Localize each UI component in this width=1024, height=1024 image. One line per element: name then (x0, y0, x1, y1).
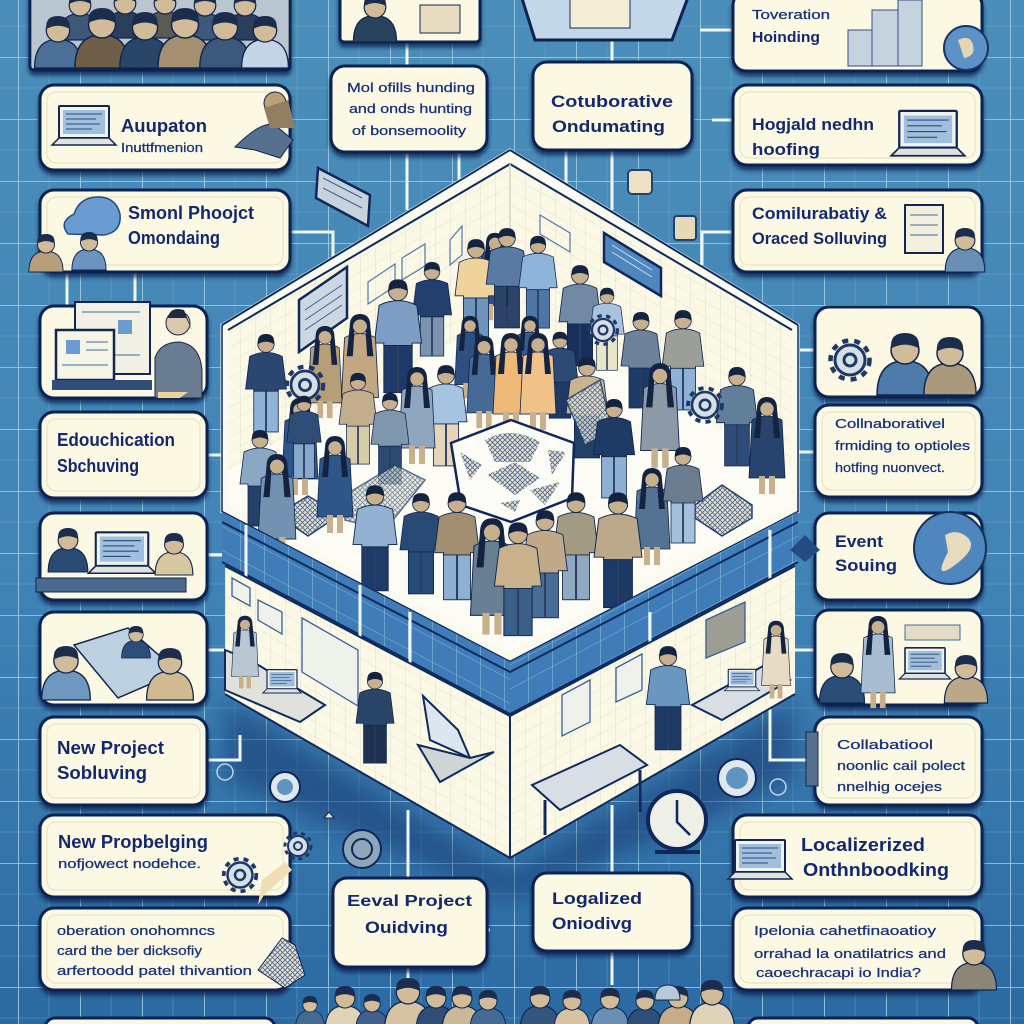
card: New Project (40, 717, 207, 805)
bottom cut-off cards (45, 1018, 978, 1024)
card: Ipelonia (733, 908, 996, 990)
card: Toveration Hooding: Toveration (752, 7, 830, 22)
round dials (217, 759, 786, 868)
lower wall charts (232, 578, 745, 736)
card: Collabatiool: nnelhig ocejes (837, 779, 943, 794)
card: Auupaton: Auupaton (121, 116, 207, 136)
card: Smart Phoject: Smonl Phoojct (128, 203, 254, 223)
card: Collaborative text: hotfing nuonvect. (835, 460, 945, 475)
card: Comilurabatiy: Comilurabatiy & (752, 204, 887, 223)
floor (228, 310, 792, 652)
icon: cloud (64, 197, 120, 235)
lower left person with laptop (225, 616, 325, 722)
card: Ipelonia: caoechracapi io India? (756, 965, 921, 980)
icon: laptop (52, 106, 116, 145)
card: centre top heading left: Mol ofills hunding (347, 80, 475, 95)
card: Logalized: Logalized (552, 889, 642, 908)
icon: seated person (235, 92, 295, 158)
room outer frame (222, 150, 798, 662)
card: Auupaton (40, 85, 295, 170)
panel: top centre-left image (340, 0, 480, 42)
icon: globe (914, 512, 986, 584)
card: Collaborative text (815, 405, 982, 497)
card: Collaborative Ondumating: Cotuborative (551, 92, 673, 111)
lower level room (225, 566, 795, 858)
card: Oberation (40, 908, 305, 990)
card: Logalized: Oniodivg (552, 914, 632, 933)
card: Collabatiool (806, 717, 982, 805)
icon: seated woman (952, 940, 996, 990)
panel: top centre-right image (520, 0, 690, 40)
card: Hogjald (733, 85, 982, 165)
card: New Propbelging: nofjowect nodehce. (58, 856, 201, 871)
card: team at laptop image (815, 610, 988, 708)
card: Collabatiool: Collabatiool (837, 737, 933, 752)
card: Ipelonia: orrahad la onatilatrics and (754, 946, 946, 961)
card: Collaborative text: Collnaborativel (835, 416, 945, 431)
icon: man (155, 309, 202, 398)
wall sketches (368, 215, 570, 304)
card: Comilurabatiy: Oraced Solluving (752, 229, 887, 248)
crouching man with laptop (356, 672, 494, 782)
card: computer screens image (40, 302, 207, 398)
floating sign outside left (316, 168, 370, 226)
card: Toveration Hooding (733, 0, 988, 71)
card: centre top heading left (331, 66, 487, 152)
icon: laptop (891, 111, 965, 156)
card: Localizerized: Localizerized (801, 835, 925, 855)
icon: city buildings (848, 0, 922, 66)
card: Hogjald: Hogjald nedhn (752, 115, 874, 134)
mesh models on floor (285, 380, 752, 536)
card: Comilurabatiy (733, 190, 985, 272)
card: Education: Sbchuving (57, 456, 139, 476)
wall screen right (604, 233, 661, 296)
group of people: middle row (240, 396, 703, 565)
right wall (510, 164, 792, 470)
icon: two people (29, 232, 106, 272)
card: Education (40, 412, 207, 498)
gear emblems (287, 316, 722, 422)
icon: globe (944, 26, 988, 70)
group of people: front row (353, 485, 642, 636)
lower left wall (225, 566, 510, 858)
card: Collaborative text: frmiding to optioles (835, 438, 971, 453)
card: Localizerized (728, 815, 982, 897)
card: Collaborative Ondumating (533, 62, 692, 150)
card: desk team image (36, 513, 207, 600)
card: Smart Phoject: Omondaing (128, 228, 220, 248)
icon: pin (790, 535, 820, 562)
card: Auupaton: Inuttfmenion (121, 140, 203, 155)
left wall (228, 164, 510, 470)
card: Eeval Project (333, 878, 487, 967)
icon: mesh figure (258, 938, 305, 988)
card: Smart Phoject (29, 190, 290, 272)
connector lines (67, 30, 815, 985)
card: Ipelonia: Ipelonia cahetfinaoatioy (754, 923, 937, 938)
wall screen left (299, 267, 347, 352)
card: Event Souing (790, 512, 986, 600)
icon: person reading (905, 205, 985, 272)
wall clock (648, 791, 706, 852)
lower right wall (510, 566, 795, 858)
card: Event Souing: Souing (835, 556, 897, 575)
card: New Propbelging: New Propbelging (58, 832, 208, 852)
card: Toveration Hooding: Hoinding (752, 29, 820, 46)
card: Oberation: oberation onohomncs (57, 923, 216, 938)
card: Collaborative Ondumating: Ondumating (552, 117, 665, 136)
central isometric room: upper level (222, 150, 798, 662)
panel: top-left people image (30, 0, 290, 70)
card: Event Souing: Event (835, 532, 883, 551)
card: Eeval Project: Eeval Project (347, 893, 473, 910)
icon: laptop (728, 840, 792, 879)
group of people: back row (246, 228, 785, 494)
card: table image (40, 612, 207, 705)
floating tags outside right (628, 170, 696, 240)
card: Eeval Project: Ouidving (365, 918, 448, 937)
card: centre top heading left: of bonsemoolity (352, 123, 467, 138)
card: Oberation: card the ber dicksofiy (57, 943, 203, 958)
icon: gears (224, 833, 311, 905)
card: New Propbelging (40, 815, 311, 905)
lower right desk and presenter (532, 621, 790, 835)
card: centre top heading left: and onds hunting (349, 101, 472, 116)
card: Hogjald: hoofing (752, 140, 820, 159)
card: Education: Edouchication (57, 430, 175, 450)
card: Oberation: arfertoodd patel thivantion (57, 963, 252, 978)
card: Localizerized: Onthnboodking (803, 860, 949, 880)
card: New Project: Sobluving (57, 763, 147, 783)
card: Logalized (533, 873, 692, 951)
central shield model (451, 420, 574, 522)
card: Collabatiool: noonlic cail polect (837, 758, 965, 773)
card: gear handshake image (815, 307, 982, 397)
shadow under lower room (225, 700, 795, 900)
blue plinth band (222, 512, 798, 714)
card: New Project: New Project (57, 738, 164, 758)
bottom crowd (296, 978, 734, 1024)
